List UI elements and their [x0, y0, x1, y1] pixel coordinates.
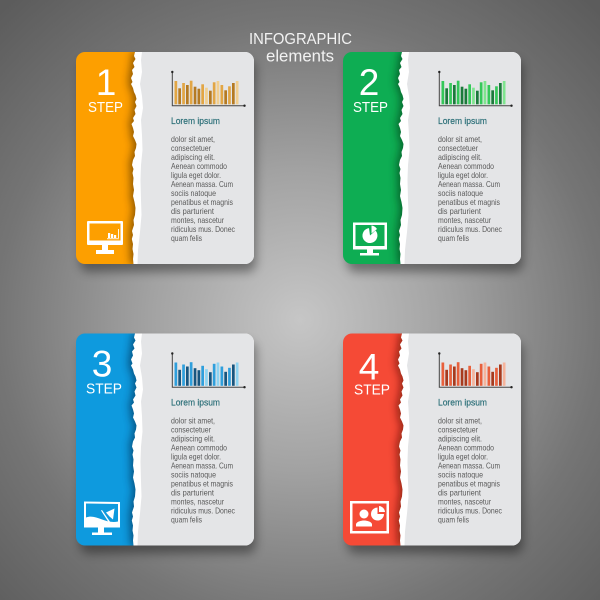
- body text: quam felis: [438, 514, 469, 524]
- bar chart: [438, 71, 513, 107]
- white paper tear: [131, 334, 254, 546]
- body text: penatibus et magnis: [438, 197, 500, 207]
- title: [249, 31, 352, 66]
- icon: presenter with pie chart: [350, 501, 389, 534]
- body text: [171, 134, 235, 243]
- body text: ligula eget dolor.: [171, 170, 221, 180]
- body text: quam felis: [171, 233, 202, 243]
- body text: Aenean commodo: [171, 161, 227, 171]
- white paper tear: [131, 52, 254, 264]
- body text: Aenean massa. Cum: [438, 179, 500, 189]
- icon: monitor with bars: [87, 221, 123, 254]
- body text: consectetuer: [171, 424, 211, 434]
- bar chart: [171, 71, 246, 107]
- body text: Aenean commodo: [171, 442, 227, 452]
- bar chart: [438, 352, 513, 388]
- body text: ligula eget dolor.: [438, 170, 488, 180]
- body text: adipiscing elit.: [438, 434, 482, 444]
- body text: Aenean massa. Cum: [438, 460, 500, 470]
- icon: monitor with pie chart: [353, 222, 387, 256]
- body text: montes, nascetur: [171, 215, 224, 225]
- step number: 4: [359, 346, 379, 388]
- body text: consectetuer: [438, 424, 478, 434]
- title: INFOGRAPHIC: [249, 31, 352, 48]
- body text: quam felis: [171, 514, 202, 524]
- body text: sociis natoque: [438, 470, 483, 480]
- body text: penatibus et magnis: [171, 197, 233, 207]
- step label: STEP: [88, 99, 123, 116]
- body text: Aenean massa. Cum: [171, 179, 233, 189]
- body text: adipiscing elit.: [171, 152, 215, 162]
- panel: step 3: [76, 334, 256, 554]
- body text: consectetuer: [171, 143, 211, 153]
- body text: dolor sit amet,: [438, 416, 482, 426]
- icon: monitor with arrow: [84, 502, 120, 535]
- bar chart: [171, 352, 246, 388]
- body text: consectetuer: [438, 143, 478, 153]
- body text: penatibus et magnis: [171, 478, 233, 488]
- body text: adipiscing elit.: [171, 434, 215, 444]
- subheading: Lorem ipsum: [438, 116, 487, 127]
- step number: 3: [92, 344, 112, 384]
- subheading: Lorem ipsum: [171, 398, 220, 408]
- body text: dolor sit amet,: [171, 416, 215, 426]
- body text: ridiculus mus. Donec: [171, 506, 235, 516]
- body text: ligula eget dolor.: [171, 452, 221, 462]
- panel: step 2: [343, 52, 523, 272]
- body text: montes, nascetur: [438, 215, 491, 225]
- step label: STEP: [354, 382, 390, 398]
- body text: ridiculus mus. Donec: [438, 224, 502, 234]
- body text: sociis natoque: [438, 188, 483, 198]
- body text: Aenean commodo: [438, 442, 494, 452]
- body text: dis parturient: [438, 206, 482, 216]
- white paper tear: [398, 334, 521, 546]
- title: elements: [266, 46, 334, 66]
- step label: STEP: [353, 99, 388, 116]
- orange torn side: [76, 52, 146, 264]
- step number: 1: [96, 62, 116, 103]
- body text: ridiculus mus. Donec: [171, 224, 235, 234]
- body text: montes, nascetur: [438, 496, 491, 506]
- body text: sociis natoque: [171, 188, 216, 198]
- body text: adipiscing elit.: [438, 152, 482, 162]
- blue torn side: [76, 334, 146, 546]
- body text: [438, 134, 502, 243]
- red torn side: [343, 334, 413, 546]
- panel: step 1: [76, 52, 256, 272]
- body text: [171, 416, 235, 524]
- step label: STEP: [86, 380, 122, 398]
- body text: dolor sit amet,: [438, 134, 482, 144]
- body text: quam felis: [438, 233, 469, 243]
- body text: dis parturient: [171, 488, 215, 498]
- green torn side: [343, 52, 413, 264]
- body text: sociis natoque: [171, 470, 216, 480]
- body text: ridiculus mus. Donec: [438, 506, 502, 516]
- body text: Aenean commodo: [438, 161, 494, 171]
- body text: Aenean massa. Cum: [171, 460, 233, 470]
- white paper tear: [398, 52, 521, 264]
- subheading: Lorem ipsum: [438, 398, 487, 408]
- step number: 2: [359, 62, 379, 103]
- body text: penatibus et magnis: [438, 478, 500, 488]
- body text: ligula eget dolor.: [438, 452, 488, 462]
- subheading: Lorem ipsum: [171, 116, 220, 127]
- body text: dolor sit amet,: [171, 134, 215, 144]
- body text: dis parturient: [171, 206, 215, 216]
- body text: [438, 416, 502, 524]
- body text: dis parturient: [438, 488, 482, 498]
- body text: montes, nascetur: [171, 496, 224, 506]
- panel: step 4: [343, 334, 523, 554]
